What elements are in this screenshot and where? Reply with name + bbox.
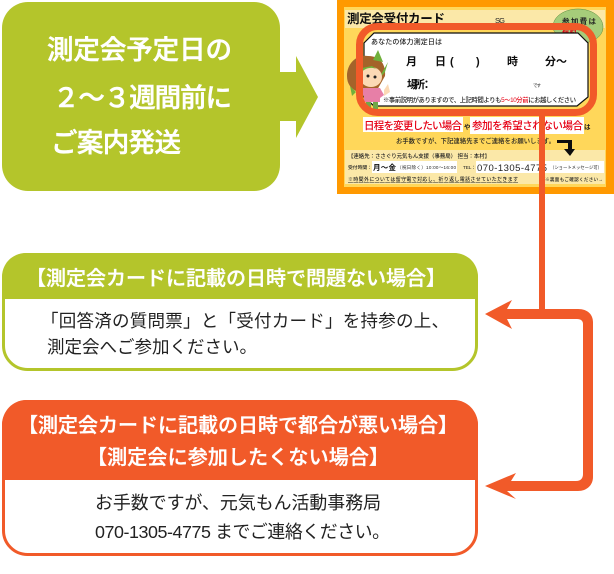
card note: change or decline: 参加を希望されない場合 — [472, 119, 584, 132]
text block: contact office: お手数ですが、元気もん活動事務局 — [95, 493, 381, 513]
text block: contact office — [95, 493, 390, 542]
card note: change or decline — [363, 117, 591, 145]
card contact block: ※時間外については留守電で対応し、折り返し電話させていただきます — [348, 176, 518, 183]
text block: bring documents — [41, 311, 449, 357]
icon: black arrow — [557, 140, 575, 156]
card note: change or decline: や — [464, 122, 471, 131]
card contents: SG — [495, 16, 505, 25]
text block: contact office: 070-1305-4775 までご連絡ください。 — [95, 522, 390, 542]
heading: cannot attend case: 【測定会カードに記載の日時で都合が悪い場合】 — [18, 414, 458, 437]
heading: cannot attend case: 【測定会に参加したくない場合】 — [87, 446, 389, 469]
arrow: card to both cases — [485, 112, 593, 499]
panel: no problem case — [2, 253, 478, 370]
heading: notice timing: ご案内発送 — [51, 128, 181, 158]
appointment box — [364, 33, 588, 106]
card contact block: ※裏面もご確認ください→ — [545, 176, 603, 183]
card contents — [344, 7, 606, 187]
appointment box: ※事前説明がありますので、上記時間よりも5～10分前にお越しください — [383, 95, 576, 104]
card contact block — [345, 150, 605, 184]
card note: change or decline: は — [584, 123, 591, 131]
card contact block: （祝日除く）10:00～16:00 — [397, 164, 456, 171]
panel: reception card — [337, 0, 614, 194]
heading: no problem case: 【測定会カードに記載の日時で問題ない場合】 — [26, 267, 446, 290]
appointment box: 日 — [435, 55, 446, 68]
icon: mascot character — [347, 50, 390, 109]
heading: notice timing — [47, 35, 232, 158]
appointment box: あなたの体力測定日は — [371, 37, 442, 46]
speech bubble: free participation — [552, 9, 603, 43]
card contact block: 070-1305-4775 — [477, 163, 547, 174]
panel: cannot attend case — [2, 400, 478, 554]
text block: bring documents: 測定会へご参加ください。 — [47, 337, 257, 357]
appointment box: 月 — [406, 55, 417, 68]
card note: change or decline: 日程を変更したい場合 — [364, 119, 462, 132]
arrow: timing to card — [279, 56, 318, 138]
card note: change or decline: お手数ですが、下記連絡先までご連絡をお願いします。 — [396, 136, 555, 145]
speech bubble: free participation: 参加費は — [562, 16, 596, 26]
heading: notice timing: ２～３週間前に — [53, 83, 232, 113]
panel: notice timing with arrow — [2, 2, 318, 191]
card contact block: TEL： — [463, 165, 476, 171]
text block: bring documents: 「回答済の質問票」と「受付カード」を持参の上、 — [41, 311, 449, 331]
appointment box: です — [533, 82, 542, 89]
appointment box: ) — [476, 56, 480, 68]
card contact block: （ショートメッセージ可） — [550, 165, 602, 171]
card contact block: 【連絡先：ささぐり元気もん支援（事務局） 担当：本村】 — [348, 152, 490, 160]
appointment box: ( — [450, 56, 454, 68]
card contact block: 受付時間： — [348, 164, 372, 171]
appointment box: 分～ — [545, 54, 567, 68]
appointment box: 時 — [507, 54, 518, 68]
heading: cannot attend case — [18, 414, 458, 469]
card title: 測定会受付カード — [347, 11, 445, 26]
card contact block: 月～金 — [373, 162, 396, 172]
speech bubble: free participation: 無料 — [562, 28, 578, 38]
appointment box: 場所： — [407, 77, 432, 91]
highlight frame — [360, 26, 594, 112]
heading: notice timing: 測定会予定日の — [47, 35, 232, 65]
